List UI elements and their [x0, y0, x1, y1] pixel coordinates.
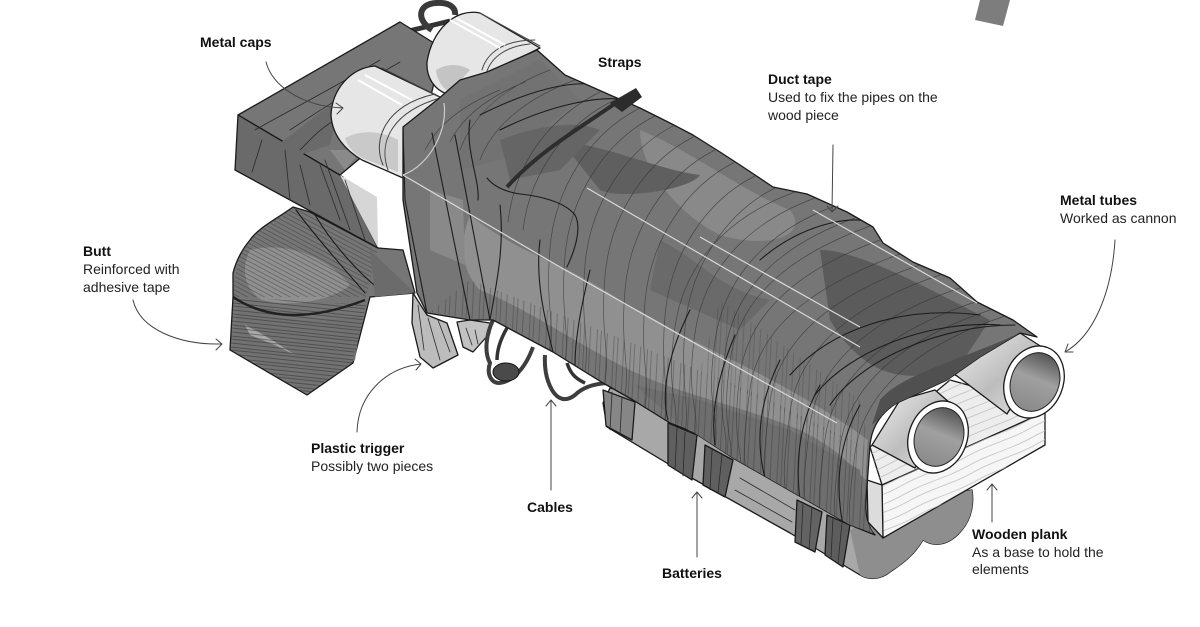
label: batteries [662, 492, 722, 581]
label: wooden plank: As a base to hold the [972, 544, 1104, 560]
upper dark patches [574, 145, 700, 194]
duct tape wrap main body [403, 50, 1037, 553]
label: plastic trigger: Possibly two pieces [311, 458, 433, 474]
label: metal caps [200, 34, 343, 114]
cables [486, 320, 607, 399]
white seam lines [403, 175, 837, 423]
fragment: cropped gray shape at top edge [975, 0, 1010, 26]
label: butt: Reinforced with [83, 261, 180, 277]
label: wooden plank: elements [972, 561, 1029, 577]
strap groove [507, 100, 620, 187]
top wrinkle family [425, 70, 1005, 553]
label: butt: adhesive tape [83, 279, 170, 295]
tube left [872, 390, 979, 482]
label: cables [527, 400, 573, 515]
label: plastic trigger [311, 359, 433, 474]
label: butt [83, 243, 222, 350]
strap clip [610, 88, 642, 112]
label: metal caps: Metal caps [200, 34, 272, 50]
lighter side band [463, 215, 868, 480]
label: straps: Straps [598, 54, 642, 70]
label: duct tape: wood piece [767, 107, 839, 123]
label: plastic trigger: Plastic trigger [311, 440, 405, 456]
metal tubes [872, 333, 1075, 482]
label: wooden plank [972, 484, 1104, 577]
battery tape bands [603, 390, 850, 567]
butt wrapped with adhesive tape [230, 207, 415, 395]
pocket fold [487, 178, 578, 267]
label: batteries: Batteries [662, 565, 722, 581]
label: wooden plank: Wooden plank [972, 526, 1068, 542]
wooden plank [867, 380, 1045, 538]
label: butt: Butt [83, 243, 111, 259]
batteries pack [603, 388, 973, 578]
metal cap rear [427, 12, 540, 94]
illustration: improvised double-barrel device [230, 0, 1075, 578]
fine side creases [430, 280, 870, 535]
strap loop behind caps [340, 3, 455, 83]
wooden stock rear block wrapped in tape [235, 22, 442, 248]
label: cables: Cables [527, 499, 573, 515]
label: metal tubes [1060, 192, 1176, 352]
overlay circle arc on front cap [403, 103, 445, 175]
tube right [950, 333, 1075, 427]
label: metal tubes: Worked as cannon [1060, 210, 1176, 226]
label: metal tubes: Metal tubes [1060, 192, 1137, 208]
main tape edges [403, 120, 590, 365]
plastic trigger [412, 293, 490, 368]
label: duct tape: Duct tape [768, 71, 832, 87]
metal cap front [331, 66, 442, 178]
label: duct tape: Used to fix the pipes on the [768, 89, 938, 105]
label: duct tape [767, 71, 938, 212]
